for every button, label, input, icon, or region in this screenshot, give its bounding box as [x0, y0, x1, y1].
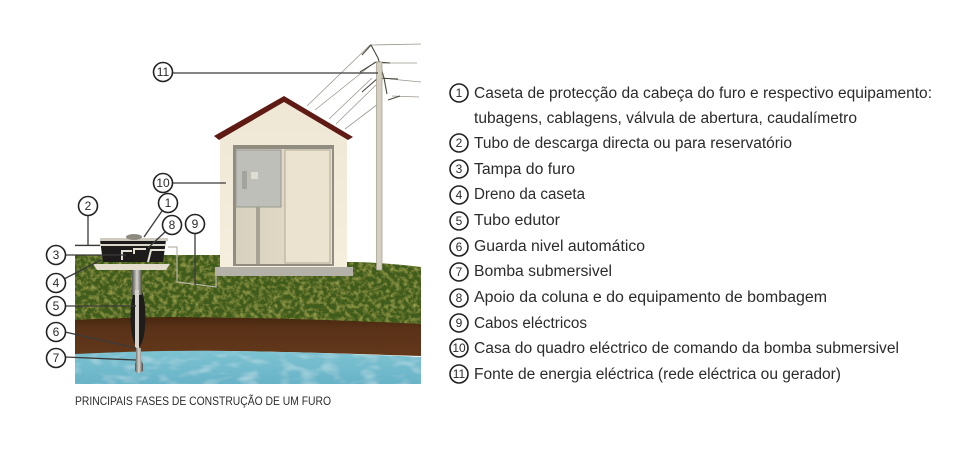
caption: PRINCIPAIS FASES DE CONSTRUÇÃO DE UM FURO — [75, 395, 331, 408]
callout 4: 4 — [53, 276, 60, 290]
legend item 2: Tubo de descarga directa ou para reservatório — [474, 135, 792, 152]
legend item 4: Dreno da caseta — [474, 186, 585, 203]
legend item 7: Bomba submersivel — [474, 263, 612, 280]
protection box — [100, 240, 166, 262]
house wall — [220, 100, 347, 267]
callout 11 — [154, 62, 378, 82]
legend item 5: 5 — [456, 214, 463, 228]
callout 7: 7 — [53, 351, 60, 365]
submersible pump — [135, 348, 143, 373]
borehole head and pipe — [75, 234, 216, 373]
door leaf — [285, 150, 330, 263]
water table — [75, 351, 421, 384]
legend item 1: 1 — [456, 86, 463, 100]
concrete slab — [215, 267, 353, 276]
electrical house — [214, 96, 353, 276]
door opening — [233, 145, 334, 266]
callout 1 — [144, 194, 178, 237]
eductor tube — [135, 290, 139, 348]
legend item 7: 7 — [456, 265, 463, 279]
legend item 6: 6 — [456, 240, 463, 254]
legend item 10: 10 — [452, 341, 466, 355]
drain plate — [93, 264, 170, 270]
soil layer — [75, 317, 421, 356]
grass layer — [75, 255, 421, 326]
legend item 3: 3 — [456, 162, 463, 176]
legend item 9: Cabos eléctricos — [474, 315, 587, 332]
legend item 1: tubagens, cablagens, válvula de abertura, caudalímetro — [474, 110, 857, 127]
lid handle — [126, 234, 142, 240]
callout 9: 9 — [192, 217, 199, 231]
legend item 8: 8 — [456, 291, 463, 305]
callout 1: 1 — [165, 196, 172, 210]
legend item 11: 11 — [453, 367, 466, 381]
callout 9 — [186, 214, 204, 285]
legend item 9: 9 — [456, 316, 463, 330]
legend item 11: Fonte de energia eléctrica (rede eléctrica ou gerador) — [474, 366, 841, 383]
legend item 4: 4 — [456, 188, 463, 202]
legend item 5: Tubo edutor — [474, 212, 560, 229]
callout 6: 6 — [53, 325, 60, 339]
callout 8: 8 — [169, 218, 176, 232]
power pole with wires — [307, 44, 421, 270]
callout 3 — [46, 246, 126, 264]
callout 2 — [75, 196, 100, 246]
discharge pipe — [75, 244, 166, 246]
cable route — [168, 247, 216, 287]
legend item 1: Caseta de protecção da cabeça do furo e respectivo equipamento: — [474, 85, 932, 102]
callout 10 — [154, 174, 226, 192]
legend item 2: 2 — [456, 136, 463, 150]
legend item 8: Apoio da coluna e do equipamento de bombagem — [474, 289, 827, 306]
roof — [214, 96, 353, 140]
internal tubing — [122, 249, 165, 262]
legend — [450, 84, 932, 383]
callout 2: 2 — [85, 199, 92, 213]
legend item 10: Casa do quadro eléctrico de comando da bomba submersivel — [474, 340, 899, 357]
legend item 3: Tampa do furo — [474, 161, 575, 178]
callout 11: 11 — [157, 65, 170, 79]
callout 7 — [46, 348, 136, 368]
inner wall — [236, 149, 332, 264]
ground cross-section — [75, 255, 421, 384]
legend item 1 — [450, 84, 932, 127]
callout 5: 5 — [53, 299, 60, 313]
borehole casing — [130, 287, 146, 347]
callout 4 — [46, 260, 101, 292]
control panel — [236, 150, 281, 264]
box lid — [100, 238, 168, 241]
callout 8 — [148, 216, 182, 248]
callout 3: 3 — [53, 248, 60, 262]
callout 10: 10 — [156, 176, 170, 190]
callout 6 — [46, 322, 136, 348]
pipe — [132, 269, 142, 295]
callout 5 — [46, 296, 136, 316]
legend item 6: Guarda nivel automático — [474, 238, 645, 255]
